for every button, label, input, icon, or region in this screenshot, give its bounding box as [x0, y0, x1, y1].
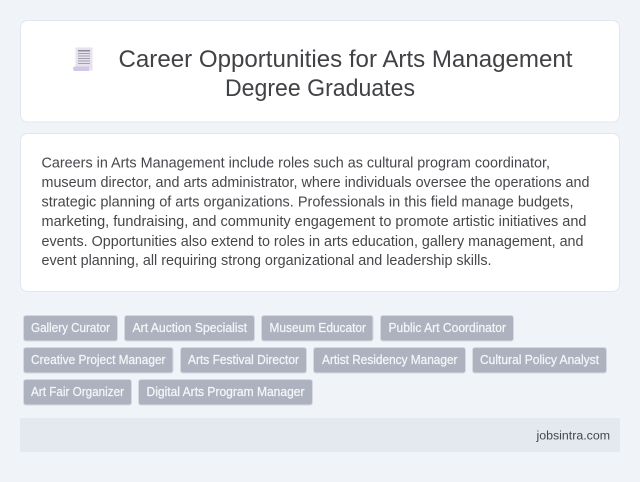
text block: description: marketing, fundraising, and community engagement to promote artistic initiatives and	[42, 214, 586, 230]
tag: Art Auction Specialist: Art Auction Specialist	[132, 320, 247, 335]
text block: description	[42, 156, 590, 269]
tag: Digital Arts Program Manager: Digital Arts Program Manager	[146, 384, 305, 399]
tag: Museum Educator: Museum Educator	[270, 320, 367, 335]
tag: Artist Residency Manager: Artist Residency Manager	[322, 352, 458, 367]
tag: Artist Residency Manager	[314, 348, 466, 373]
tag: Cultural Policy Analyst: Cultural Policy Analyst	[480, 352, 599, 367]
title	[118, 46, 573, 102]
tag: Arts Festival Director: Arts Festival Director	[188, 352, 300, 367]
tag: Museum Educator	[262, 316, 373, 341]
text block: description: events. Opportunities also extend to roles in arts education, gallery management, and	[42, 234, 584, 250]
tag: Gallery Curator: Gallery Curator	[31, 320, 111, 335]
text block: description: event planning, all requiring strong organizational and leadership skills.	[42, 253, 492, 269]
title: Career Opportunities for Arts Management	[118, 46, 573, 73]
tag: Art Fair Organizer: Art Fair Organizer	[31, 384, 125, 399]
tag: Gallery Curator	[24, 316, 118, 341]
footer text: jobsintra.com: jobsintra.com	[536, 428, 610, 442]
tag: Arts Festival Director	[180, 348, 306, 373]
tag: Public Art Coordinator	[380, 316, 514, 341]
tag: Cultural Policy Analyst	[472, 348, 606, 373]
icon: document scroll	[73, 48, 92, 71]
text block: description: Careers in Arts Management include roles such as cultural program coordinator,	[42, 156, 550, 172]
tag group	[24, 316, 606, 405]
panel: description card	[20, 134, 620, 292]
tag: Art Fair Organizer	[24, 380, 132, 405]
text block: description: museum director, and arts administrator, where individuals oversee the operations and	[42, 175, 590, 191]
tag: Creative Project Manager	[24, 348, 173, 373]
footer bar	[20, 418, 620, 452]
tag: Creative Project Manager: Creative Project Manager	[31, 352, 166, 367]
tag: Art Auction Specialist	[124, 316, 254, 341]
panel: header card	[20, 20, 620, 122]
title: Degree Graduates	[225, 75, 415, 102]
tag: Digital Arts Program Manager	[138, 380, 312, 405]
text block: description: strategic planning of arts organizations. Professionals in this field manage budgets,	[42, 194, 574, 210]
tag: Public Art Coordinator: Public Art Coordinator	[388, 320, 507, 335]
